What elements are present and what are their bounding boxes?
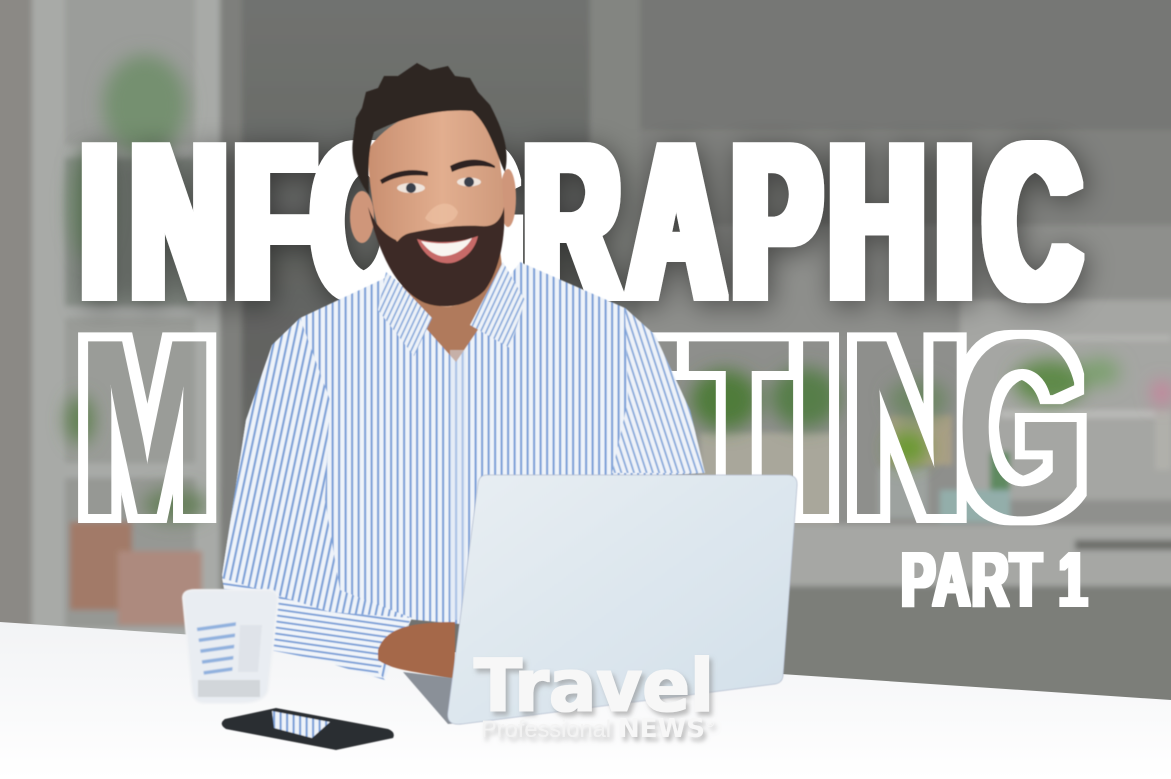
phone bbox=[222, 708, 394, 750]
man bbox=[222, 63, 705, 680]
laptop lid bbox=[448, 475, 797, 724]
hair bbox=[352, 63, 507, 195]
logo: Travel Professional News bbox=[474, 644, 715, 744]
teeth bbox=[421, 238, 472, 256]
table bbox=[0, 622, 1171, 779]
left ear bbox=[350, 191, 374, 243]
right eyebrow bbox=[450, 160, 495, 172]
mouth bbox=[417, 236, 478, 263]
left eyebrow bbox=[380, 170, 428, 184]
laptop base bbox=[403, 672, 470, 724]
face bbox=[368, 107, 503, 307]
shirt body bbox=[222, 262, 705, 625]
title: MARKETING outline: MARKETING bbox=[78, 289, 1086, 566]
logo word: Travel: Travel bbox=[474, 644, 714, 729]
right ear bbox=[500, 169, 516, 227]
left sleeve bbox=[222, 318, 412, 678]
right eye bbox=[457, 177, 481, 187]
beard bbox=[368, 207, 504, 306]
glass of water bbox=[183, 590, 278, 703]
nose highlight bbox=[425, 204, 458, 224]
cuff bbox=[330, 612, 412, 680]
subtitle: PART 1: PART 1 bbox=[901, 537, 1089, 622]
placket bbox=[450, 350, 466, 620]
right sleeve bbox=[612, 308, 705, 473]
collar right bbox=[470, 262, 525, 348]
title: INFOGRAPHIC: INFOGRAPHIC bbox=[81, 97, 1080, 345]
logo word: NEWS: NEWS bbox=[618, 714, 705, 744]
lower forearm bbox=[222, 578, 345, 665]
laptop bbox=[403, 475, 797, 724]
logo word: Professional: Professional bbox=[481, 716, 611, 743]
neck bbox=[392, 250, 505, 362]
collar left bbox=[378, 272, 432, 356]
left eye bbox=[397, 183, 425, 193]
logo word: NEWS: ® bbox=[705, 719, 715, 730]
background plants bbox=[66, 55, 1171, 521]
hand bbox=[378, 622, 455, 680]
